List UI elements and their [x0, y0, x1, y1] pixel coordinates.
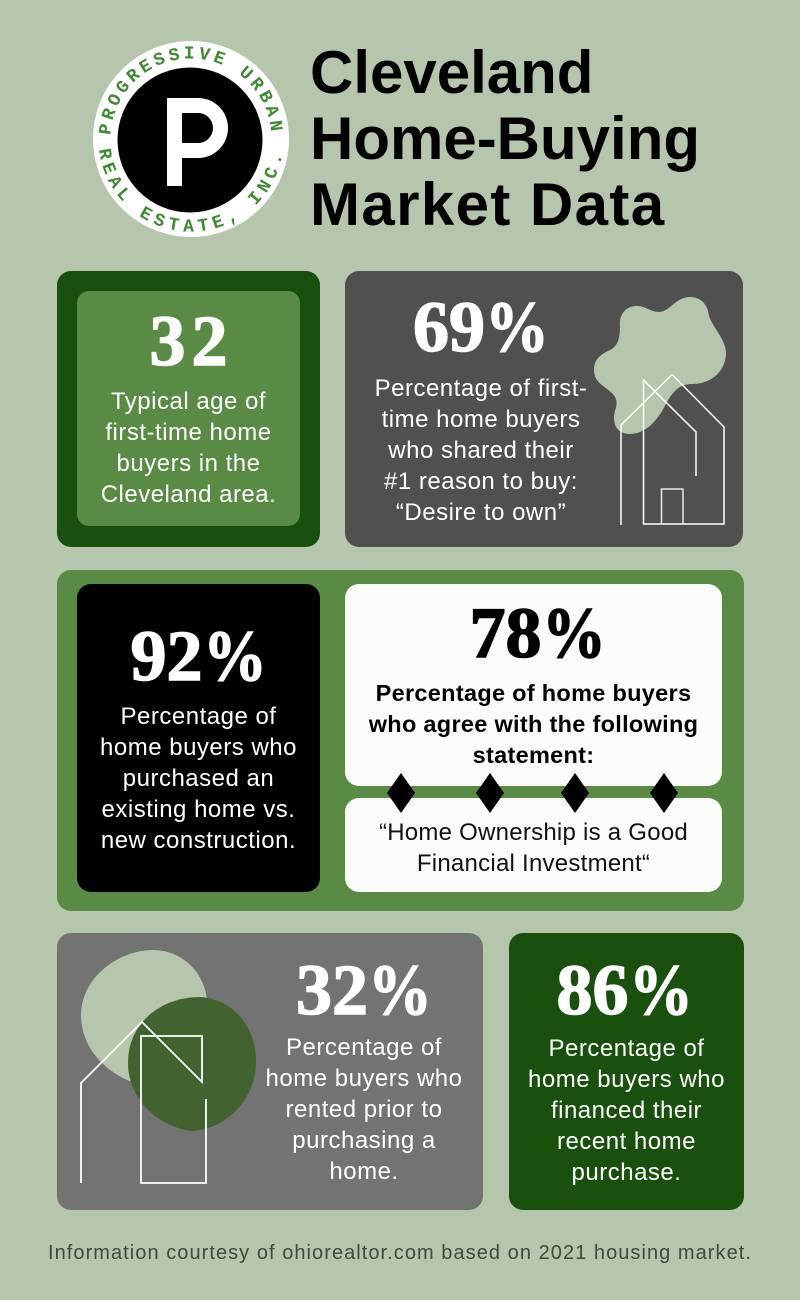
panel: typical age	[57, 271, 320, 547]
stat: 78%: 78	[470, 593, 542, 673]
text: financed: purchase.	[572, 1159, 681, 1186]
stat: 86%: 86	[556, 950, 628, 1030]
text: agreement statement	[368, 680, 698, 768]
card: black	[77, 584, 320, 892]
icon: house with tree blob	[594, 297, 726, 525]
title: Home-Buying	[310, 105, 700, 172]
text: existing home: existing home vs.	[102, 796, 295, 823]
text: quote	[379, 819, 688, 877]
text: quote: “Home Ownership is a Good	[379, 819, 688, 846]
stat: 32: 32	[150, 301, 234, 381]
stat: 92%: 92	[130, 616, 202, 696]
text: typical age: Typical age of	[111, 388, 266, 415]
text: rented prior: rented prior to	[286, 1096, 442, 1123]
stat: 92%	[130, 616, 266, 696]
text: existing home: Percentage of	[121, 703, 276, 730]
icon: diamonds	[387, 773, 678, 813]
card: 78%	[345, 584, 722, 786]
title	[310, 39, 700, 238]
text: financed: recent home	[557, 1128, 696, 1155]
text: rented prior: Percentage of	[286, 1034, 442, 1061]
text: desire to own: #1 reason to buy:	[384, 468, 578, 495]
text: agreement statement: who agree with the following	[369, 711, 698, 737]
stat: 69%	[413, 287, 549, 367]
title: Market Data	[310, 171, 666, 238]
text: desire to own	[375, 375, 587, 526]
icon: house with blobs	[80, 950, 256, 1184]
text: typical age: buyers in the	[117, 450, 260, 477]
text: rented prior: home.	[329, 1158, 399, 1185]
text: agreement statement: statement:	[473, 742, 594, 768]
text: existing home: new construction.	[101, 827, 296, 854]
footer source: Information courtesy of ohiorealtor.com based on 2021 housing market.	[48, 1242, 752, 1264]
text: financed: financed their	[551, 1097, 702, 1124]
title: Cleveland	[310, 39, 593, 106]
text: desire to own: time home buyers	[382, 406, 580, 433]
stat: 32%: 32	[296, 950, 368, 1030]
text: financed	[528, 1035, 725, 1186]
text: desire to own: “Desire to own”	[396, 499, 566, 526]
text: existing home: purchased an	[123, 765, 274, 792]
text: financed: home buyers who	[528, 1066, 725, 1093]
text: rented prior: home buyers who	[266, 1065, 462, 1092]
stat: 78%	[470, 593, 605, 673]
stat: 78%: %	[542, 593, 605, 673]
text: typical age: Cleveland area.	[101, 481, 276, 508]
text: desire to own: who shared their	[388, 437, 574, 464]
text: typical age	[101, 388, 276, 508]
panel: desire to own	[345, 271, 743, 547]
text: financed: Percentage of	[549, 1035, 704, 1062]
panel: existing home and investment group	[57, 570, 744, 911]
text: typical age: first-time home	[105, 419, 272, 446]
stat: 69%: %	[485, 287, 549, 367]
text: rented prior	[266, 1034, 462, 1185]
text: rented prior: purchasing a	[292, 1127, 436, 1154]
stat: 32%: %	[368, 950, 432, 1030]
inner card	[77, 291, 300, 526]
logo: REAL ESTATE, INC.	[99, 148, 282, 232]
text: existing home	[100, 703, 297, 854]
panel: rented prior	[57, 933, 483, 1210]
text: quote: Financial Investment“	[417, 850, 650, 877]
stat: 86%: %	[629, 950, 692, 1030]
stat: 32%	[296, 950, 432, 1030]
card: quote	[345, 798, 722, 892]
text: desire to own: Percentage of first-	[375, 375, 587, 402]
stat: 69%: 69	[413, 287, 485, 367]
text: existing home: home buyers who	[100, 734, 297, 761]
stat: 92%: %	[203, 616, 266, 696]
stat: 86%	[556, 950, 692, 1030]
logo: PROGRESSIVE URBAN	[98, 46, 283, 134]
panel: financed	[509, 933, 744, 1210]
logo	[93, 41, 289, 237]
text: agreement statement: Percentage of home buyers	[376, 680, 691, 706]
